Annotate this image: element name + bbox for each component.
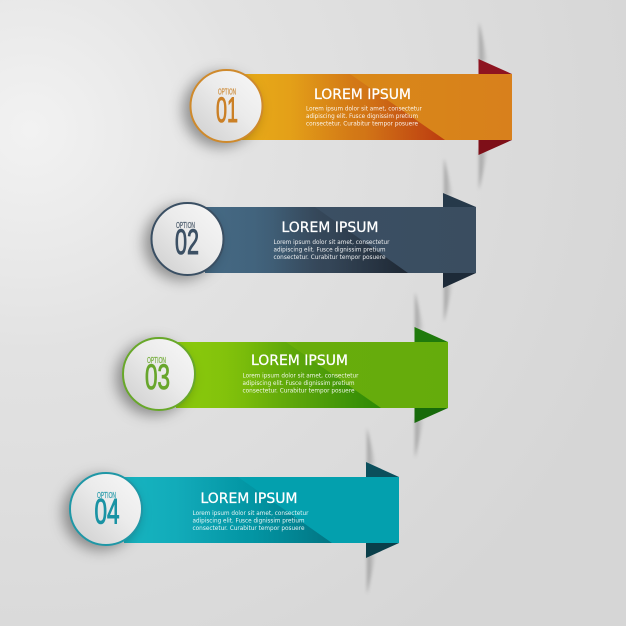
body text: Lorem ipsum dolor sit amet, consectetur — [306, 106, 422, 112]
ribbon band — [176, 342, 448, 408]
ribbon band — [240, 74, 512, 140]
number circle — [190, 70, 262, 142]
ribbon tails — [414, 327, 448, 423]
body text: consectetur. Curabitur tempor posuere — [192, 525, 305, 532]
body text: consectetur. Curabitur tempor posuere — [274, 254, 386, 261]
number circle — [123, 338, 195, 410]
heading: LOREM IPSUM — [314, 87, 411, 103]
number circle: OPTION — [218, 88, 236, 96]
heading: LOREM IPSUM — [251, 353, 348, 369]
body text — [192, 510, 309, 532]
body text: Lorem ipsum dolor sit amet, consectetur — [274, 239, 390, 246]
body text — [306, 106, 422, 128]
fold shadows — [444, 158, 453, 322]
circle shadow — [63, 476, 137, 550]
panel: option 02 — [144, 158, 476, 322]
circle shadow — [183, 73, 257, 147]
number circle: OPTION — [176, 221, 195, 230]
ribbon tails — [443, 193, 476, 288]
number circle — [70, 473, 142, 545]
number circle: OPTION — [97, 491, 116, 500]
fold shadows — [479, 22, 488, 190]
body text — [242, 372, 359, 394]
ribbon band — [124, 477, 399, 543]
fold shadows — [367, 428, 376, 594]
heading: LOREM IPSUM — [200, 491, 298, 507]
panel: option 03 — [116, 292, 448, 458]
body text: consectetur. Curabitur tempor posuere — [242, 388, 355, 394]
panel: option 04 — [63, 428, 399, 594]
panel: option 01 — [183, 22, 512, 190]
heading: LOREM IPSUM — [282, 220, 378, 236]
body text: adipiscing elit. Fusce dignissim pretium — [274, 246, 386, 254]
ribbon tails — [478, 59, 512, 155]
fold shadows — [415, 292, 424, 458]
ribbon tails — [366, 462, 399, 558]
number circle — [152, 203, 224, 275]
body text: Lorem ipsum dolor sit amet, consectetur — [192, 510, 309, 517]
body text: adipiscing elit. Fusce dignissim pretium — [306, 113, 418, 120]
ribbon band — [205, 207, 476, 273]
body text: adipiscing elit. Fusce dignissim pretium — [192, 518, 304, 524]
circle shadow — [116, 341, 190, 415]
number circle: OPTION — [147, 356, 166, 365]
body text — [274, 239, 390, 261]
body text: Lorem ipsum dolor sit amet, consectetur — [242, 372, 359, 380]
body text: adipiscing elit. Fusce dignissim pretium — [242, 380, 354, 387]
body text: consectetur. Curabitur tempor posuere — [306, 120, 418, 128]
number circle: 03 — [145, 358, 170, 397]
number circle: 04 — [94, 492, 120, 532]
number circle: 02 — [175, 223, 199, 262]
circle shadow — [144, 206, 218, 280]
number circle: 01 — [216, 91, 238, 130]
